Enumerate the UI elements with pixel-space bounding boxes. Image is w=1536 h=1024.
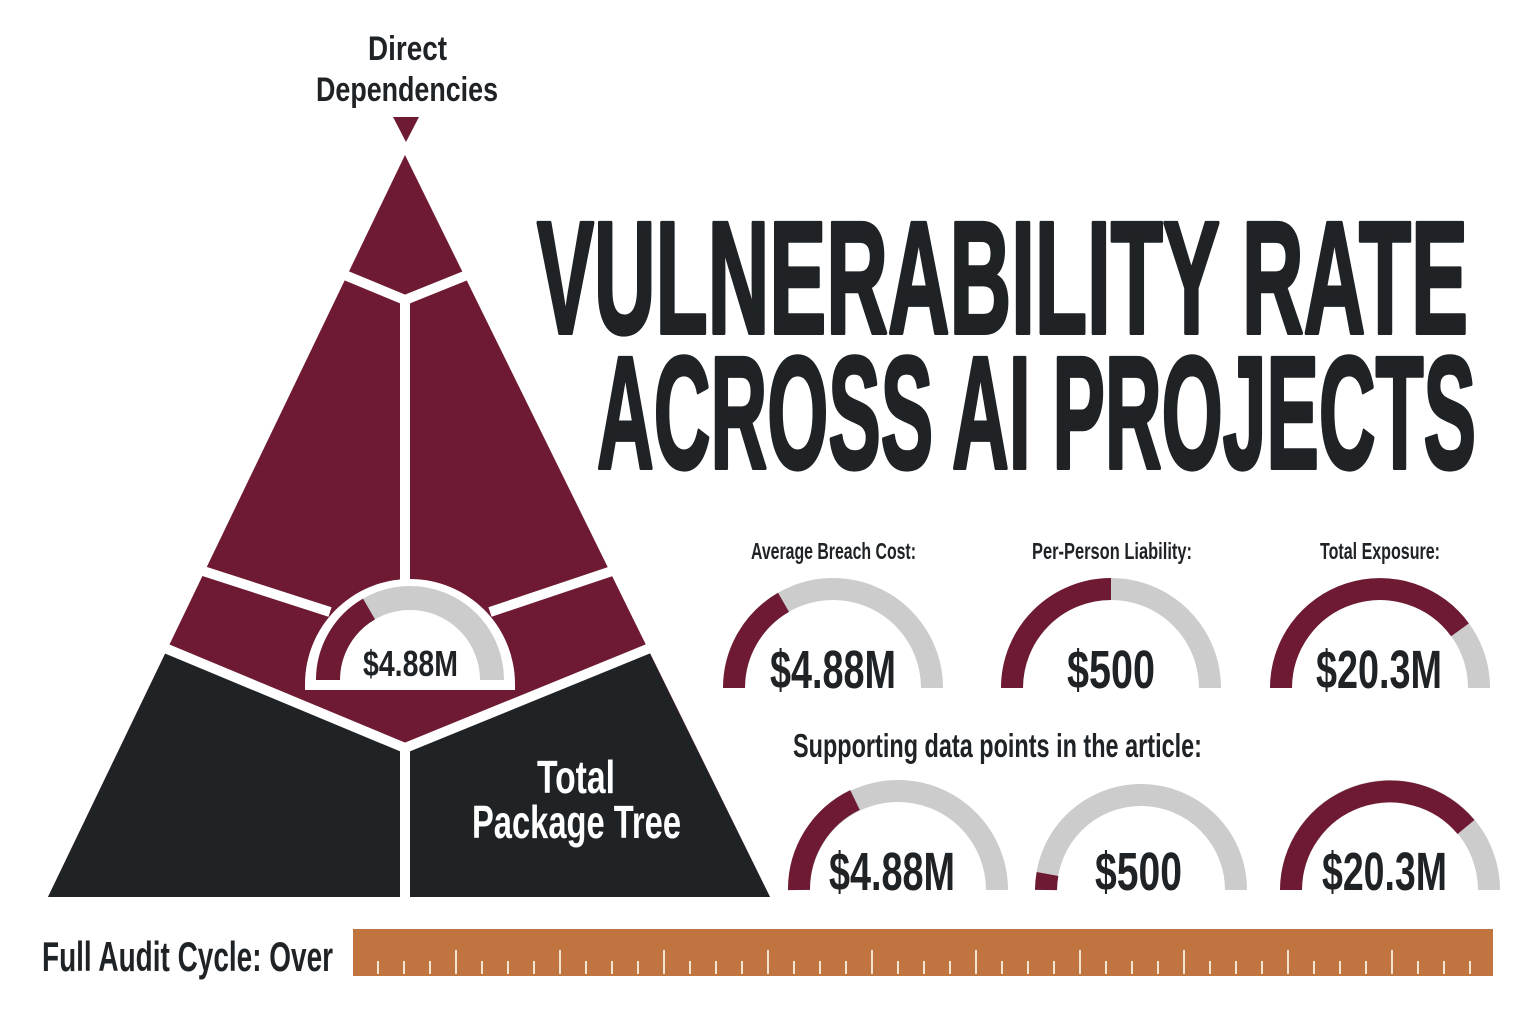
gauge: supporting 500: $500 [1095,842,1182,902]
label: total package tree: Total [537,751,615,803]
gauge: supporting 500 [1046,795,1236,902]
gauge: per-person liability: Per-Person Liability: [1032,538,1192,564]
gauge: per-person liability [1012,538,1210,700]
label: direct dependencies: Dependencies [316,71,498,109]
timeline ruler [353,929,1493,976]
label: direct dependencies: Direct [368,30,447,68]
pyramid gauge: $4.88M [363,643,458,684]
gauge: total exposure: Total Exposure: [1320,538,1440,564]
gauge: total exposure [1281,538,1479,700]
gauge: supporting 20.3M: $20.3M [1322,842,1447,902]
gauge: per-person liability: $500 [1067,640,1155,700]
subheading: supporting data: Supporting data points in the article: [793,727,1202,764]
gauge: average breach cost: Average Breach Cost: [751,538,916,564]
pyramid chart [48,155,770,900]
pyramid gauge [305,579,515,690]
label: total package tree [472,751,681,848]
gauge: supporting 20.3M [1291,791,1489,902]
pyramid base: total package tree [48,650,770,897]
label: full audit cycle: Full Audit Cycle: Over [42,933,333,980]
label: direct dependencies [316,30,498,142]
gauge: supporting 4.88M [799,791,997,902]
gauge: average breach cost: $4.88M [770,640,896,700]
label: total package tree: Package Tree [472,796,681,848]
gauge: total exposure: $20.3M [1316,640,1442,700]
gauge: average breach cost [734,538,932,700]
gauge: supporting 4.88M: $4.88M [829,842,955,902]
title [537,188,1476,502]
